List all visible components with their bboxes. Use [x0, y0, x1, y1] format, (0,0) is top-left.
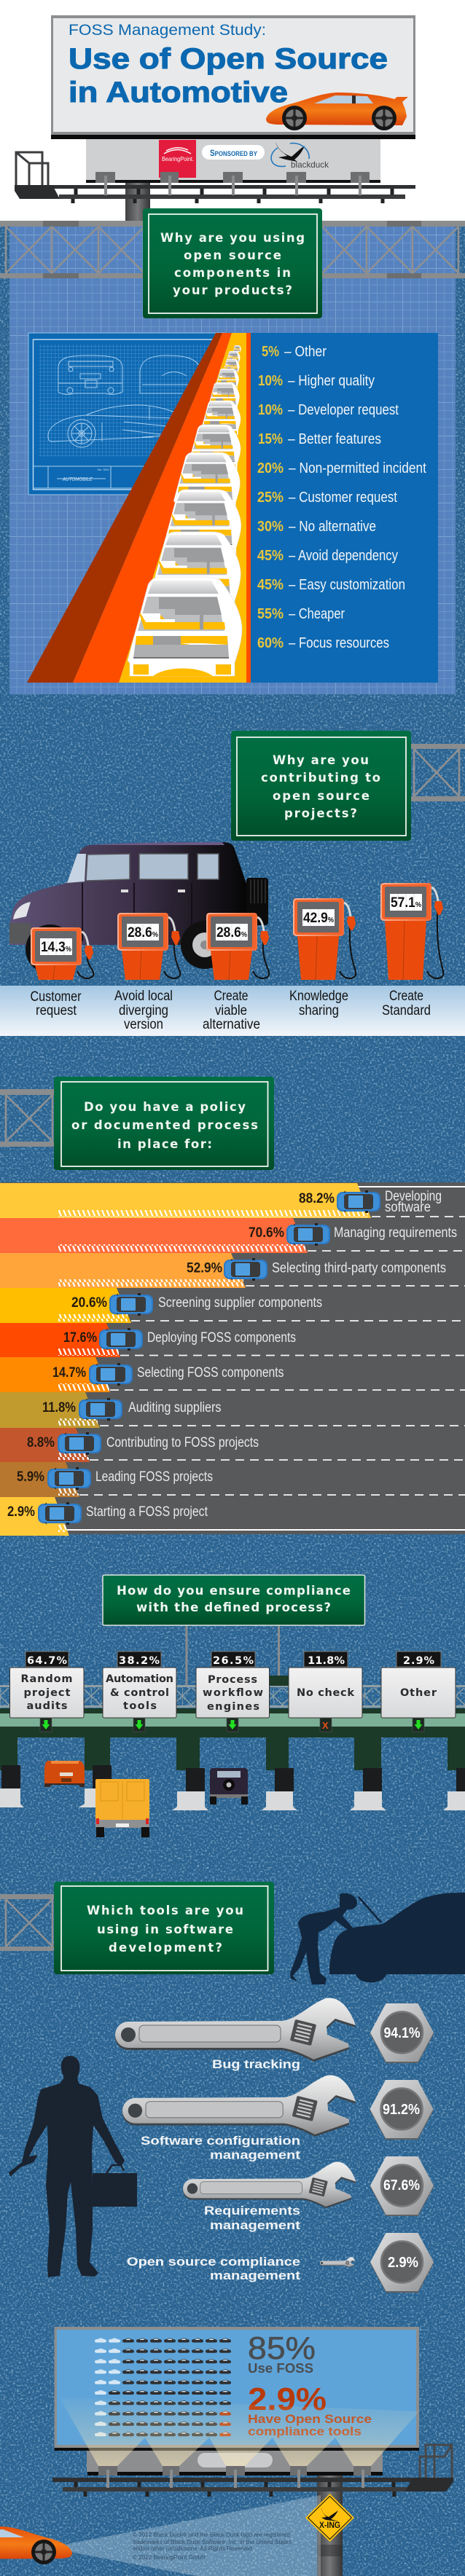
billboard railing	[16, 152, 48, 185]
toll: Other 2.9%: 2.9%	[403, 1655, 434, 1667]
pump: Knowledge sharing 42.9%	[293, 898, 356, 980]
logo: Black Duck: blackduck	[291, 160, 329, 170]
sign: How do you ensure compliance	[103, 1575, 364, 1625]
bar: Software configuration management 91.2%	[122, 2076, 433, 2162]
bottom lamps	[98, 2466, 371, 2488]
stat: 2.9% have compliance tools: compliance tools	[248, 2424, 362, 2438]
bar: Requirements management 67.6%: 67.6%	[383, 2178, 420, 2194]
toll: No check 11.8%: 11.8%	[308, 1655, 345, 1667]
copyright text: trademarks of Black Duck Software, Inc. in the United States	[133, 2539, 292, 2545]
car pictogram: dark second column	[109, 2390, 120, 2436]
bar: Screening supplier components 20.6%	[0, 1288, 322, 1323]
stat: 2.9% have compliance tools: Have Open Source	[248, 2412, 372, 2426]
toll: Process workflow engines 26.5%: 26.5%	[213, 1655, 254, 1667]
sponsored by pill	[202, 145, 265, 160]
sign: duck crossing	[305, 2494, 354, 2542]
panel: blueprint chart	[27, 333, 438, 683]
headlight beam	[64, 2495, 321, 2576]
toll: Automation & control tools 38.2%: & control	[110, 1687, 169, 1699]
toll: Process workflow engines 26.5%: engines	[207, 1701, 259, 1713]
bar: Screening supplier components 20.6%: 20.6%	[71, 1295, 107, 1311]
silhouette: mechanic and car	[290, 1893, 465, 1984]
toll: Random project audits 64.7%: 64.7%	[27, 1655, 67, 1667]
legend values	[257, 344, 426, 651]
sign: policy or documented process: Do you have a policy	[84, 1100, 246, 1114]
logo: BearingPoint: BearingPoint.	[162, 155, 194, 162]
panel: blueprint backdrop	[9, 227, 456, 694]
label strip under pumps: Create	[389, 989, 423, 1004]
bar: Bug tracking 94.1%	[115, 1998, 434, 2071]
bar: Leading FOSS projects 5.9%: Leading FOSS projects	[95, 1469, 213, 1485]
legend values: 55%	[257, 606, 284, 622]
bar: Selecting third-party components 52.9%: 52.9%	[187, 1260, 222, 1276]
catwalk	[15, 185, 415, 203]
billboard support panel	[86, 139, 380, 183]
lamp light beams	[59, 2397, 419, 2466]
road surface	[0, 1182, 465, 1534]
car pictogram: white cars	[95, 2339, 120, 2436]
bar: Requirements management 67.6%	[183, 2156, 434, 2232]
toll: Automation & control tools 38.2%: Automation	[106, 1673, 173, 1685]
bar: Deploying FOSS components 17.6%	[0, 1323, 296, 1357]
legend values: – Avoid dependency	[289, 548, 398, 564]
silhouette: mechanic with toolbox	[9, 2056, 137, 2277]
toll: Process workflow engines 26.5%: Process	[208, 1674, 257, 1686]
toll: Random project audits 64.7%: project	[23, 1687, 71, 1699]
sign: Which tools are you using: development?	[109, 1941, 222, 1955]
bar: Auditing suppliers 11.8%	[0, 1392, 222, 1428]
copyright text: and/or other jurisdictions. All Rights Reserved.	[133, 2545, 254, 2552]
chart road wedge	[27, 333, 251, 683]
toll: Automation & control tools 38.2%	[103, 1652, 176, 1732]
toll: Other 2.9%: Other	[400, 1687, 437, 1699]
panel: top billboard	[15, 15, 415, 222]
label strip under pumps: sharing	[299, 1003, 339, 1018]
toll: Automation & control tools 38.2%: 38.2%	[119, 1655, 160, 1667]
bar: Auditing suppliers 11.8%: Auditing suppliers	[128, 1400, 222, 1415]
label strip under pumps: Customer	[31, 989, 82, 1005]
sign: policy or documented process: in place for:	[117, 1137, 212, 1151]
legend values: 25%	[257, 490, 284, 506]
bar: Open source compliance management 2.9%: 2.9%	[388, 2255, 418, 2271]
bottom railing	[420, 2445, 452, 2478]
bar: Open source compliance management 2.9%: Open source compliance	[127, 2255, 300, 2269]
icon: yellow van rear	[95, 1779, 149, 1837]
sign: Why are you using open source components: Why are you using	[160, 231, 305, 245]
sign support poles	[187, 1625, 278, 1686]
sign: How do you ensure compliance: How do you ensure compliance	[117, 1584, 351, 1598]
bottom billboard face	[54, 2327, 419, 2451]
bar: Starting a FOSS project 2.9%: Starting a FOSS project	[86, 1504, 208, 1520]
legend panel	[246, 333, 438, 683]
legend values: – Cheaper	[289, 606, 345, 622]
car pictogram: dark cars	[122, 2339, 217, 2436]
stat: 2.9% have compliance tools: 2.9%	[248, 2381, 327, 2417]
toll: Automation & control tools 38.2%: tools	[123, 1700, 157, 1712]
bar: Screening supplier components 20.6%: Screening supplier components	[158, 1295, 322, 1311]
bar: Software configuration management 91.2%: Software configuration	[141, 2134, 300, 2148]
bar: Managing requirements 70.6%: 70.6%	[249, 1225, 284, 1241]
sponsored by pill: SPONSORED BY	[210, 148, 258, 158]
toll: Random project audits 64.7%	[10, 1652, 84, 1732]
bar: Leading FOSS projects 5.9%	[0, 1462, 213, 1497]
legend values: – Developer request	[288, 402, 399, 418]
sign: How do you ensure compliance: with the defined process?	[136, 1601, 331, 1614]
chart: process road bars	[0, 1182, 465, 1536]
truss: second gantry	[411, 744, 465, 801]
copyright text: © 2012 Black Duck® and the Black Duck logo are registered	[133, 2532, 290, 2538]
label strip under pumps: Standard	[382, 1003, 431, 1018]
bar: Developing software 88.2%	[0, 1183, 442, 1218]
bridge deck and pillars	[0, 1676, 465, 1810]
legend values: 45%	[257, 548, 284, 564]
sign: Why are you contributing: projects?	[284, 806, 357, 820]
toll: Process workflow engines 26.5%: workflow	[203, 1687, 263, 1699]
legend values: – No alternative	[289, 519, 376, 535]
label strip under pumps: viable	[215, 1003, 247, 1018]
blueprint drawing	[28, 333, 226, 495]
legend values: – Non-permitted incident	[289, 460, 426, 476]
legend values: 10%	[258, 373, 283, 389]
icon: orange car front	[0, 2526, 72, 2564]
toll: Other 2.9%	[381, 1652, 456, 1732]
sign: Which tools are you using: Which tools are you	[87, 1904, 243, 1917]
bar: Selecting third-party components 52.9%	[0, 1253, 446, 1288]
bar: Contributing to FOSS projects 8.8%	[0, 1428, 259, 1462]
bar: Software configuration management 91.2%: management	[210, 2148, 300, 2162]
title	[69, 43, 388, 109]
bar: Bug tracking 94.1%: 94.1%	[383, 2025, 421, 2041]
legend values: – Higher quality	[288, 373, 375, 389]
label strip under pumps	[0, 986, 465, 1036]
bar: Deploying FOSS components 17.6%: Deploying FOSS components	[147, 1330, 296, 1346]
bottom pole	[317, 2475, 343, 2576]
pump: Customer request 14.3%: 14.3%	[41, 940, 71, 955]
toll: No check 11.8%	[289, 1652, 362, 1732]
sign: Which tools are you using: using in software	[97, 1923, 233, 1936]
billboard face	[51, 15, 415, 139]
label strip under pumps: Knowledge	[289, 989, 348, 1004]
bridge truss	[0, 1686, 465, 1706]
bar: Open source compliance management 2.9%: management	[210, 2269, 300, 2282]
blueprint drawing: AUTOMOBILE	[62, 476, 93, 482]
title: Use of Open Source	[69, 43, 388, 75]
sign: Why are you contributing: open source	[273, 789, 370, 803]
bar: Selecting FOSS components 14.7%: Selecting FOSS components	[137, 1365, 284, 1381]
blueprint drawing: No. 3211	[98, 468, 110, 471]
pump: Customer request 14.3%	[31, 927, 93, 980]
bar: Contributing to FOSS projects 8.8%: 8.8%	[27, 1435, 55, 1450]
panel: bottom billboard	[52, 2327, 453, 2576]
pump: Avoid local diverging version 28.6%	[117, 913, 180, 980]
billboard lamps	[95, 172, 370, 195]
sign: Why are you using open source components: your products?	[173, 283, 292, 297]
bar: Selecting FOSS components 14.7%: 14.7%	[52, 1365, 86, 1381]
bottom catwalk	[52, 2478, 453, 2497]
sign: Why are you contributing	[231, 731, 411, 841]
label strip under pumps: request	[36, 1003, 77, 1018]
legend values: 20%	[257, 460, 284, 476]
bar: Starting a FOSS project 2.9%: 2.9%	[7, 1504, 35, 1520]
bar: Leading FOSS projects 5.9%: 5.9%	[17, 1469, 44, 1485]
legend values: – Focus resources	[289, 635, 389, 651]
bar: Selecting FOSS components 14.7%	[0, 1357, 284, 1392]
sign: Why are you using open source components	[143, 208, 322, 318]
truss: fourth gantry	[0, 1894, 54, 1951]
bar: Requirements management 67.6%: Requirements	[204, 2204, 300, 2218]
label strip under pumps: alternative	[203, 1017, 260, 1032]
bar: Software configuration management 91.2%: 91.2%	[383, 2102, 420, 2118]
legend values: 45%	[257, 577, 284, 593]
bar: Requirements management 67.6%: management	[210, 2218, 300, 2232]
label strip under pumps: diverging	[119, 1003, 168, 1018]
chart cars in perspective	[128, 345, 242, 676]
legend values: – Other	[284, 344, 327, 360]
toll: No check 11.8%: X	[322, 1720, 329, 1731]
bar: Managing requirements 70.6%	[0, 1218, 457, 1253]
toll: Random project audits 64.7%: Random	[20, 1673, 73, 1685]
label strip under pumps: Create	[214, 989, 248, 1004]
stat: 2.9% have compliance tools	[248, 2381, 372, 2438]
bar: Auditing suppliers 11.8%: 11.8%	[42, 1400, 76, 1415]
label strip under pumps: version	[124, 1017, 163, 1032]
pump: Create viable alternative 28.6%: 28.6%	[216, 925, 247, 941]
pump: Avoid local diverging version 28.6%: 28.6%	[128, 925, 158, 941]
billboard pole	[125, 183, 150, 222]
sign: policy or documented process	[54, 1077, 274, 1170]
pump: Knowledge sharing 42.9%: 42.9%	[303, 911, 334, 926]
sign: Why are you contributing: contributing to	[261, 771, 380, 785]
logo: BearingPoint	[159, 140, 196, 178]
panel: toll bridge	[0, 1575, 465, 1837]
bar: Developing software 88.2%: 88.2%	[299, 1191, 335, 1206]
car pictogram: last column	[219, 2339, 231, 2436]
toll: Process workflow engines 26.5%	[196, 1652, 270, 1732]
legend values: 60%	[257, 635, 284, 651]
copyright text	[133, 2532, 292, 2561]
toll: Random project audits 64.7%: audits	[26, 1700, 67, 1712]
icon: orange sports car	[266, 93, 408, 130]
bar: Developing software 88.2%: Developing	[385, 1189, 442, 1204]
bar: Starting a FOSS project 2.9%	[0, 1497, 208, 1536]
pump: Create viable alternative 28.6%	[206, 913, 269, 980]
truss: third gantry	[0, 1089, 54, 1147]
legend values: – Better features	[288, 431, 381, 447]
sign: Which tools are you using	[54, 1882, 274, 1974]
sign: Why are you using open source components: open source	[184, 248, 281, 262]
logo: Black Duck	[271, 141, 329, 170]
pump: Create Standard 57.1%: 57.1%	[391, 895, 421, 911]
label strip under pumps: Avoid local	[114, 989, 173, 1004]
legend values: 30%	[257, 519, 284, 535]
sign: policy or documented process: or documented process	[71, 1118, 258, 1132]
stat: 85% use FOSS: 85%	[248, 2330, 316, 2366]
bar: Contributing to FOSS projects 8.8%: Contributing to FOSS projects	[106, 1435, 259, 1450]
title: in Automotive	[69, 76, 288, 109]
bar: Bug tracking 94.1%: Bug tracking	[212, 2057, 300, 2071]
sign: Why are you using open source components: components in	[174, 266, 291, 280]
stat: 85% use FOSS: Use FOSS	[248, 2361, 313, 2376]
copyright text: © 2012 BearingPoint GmbH	[133, 2554, 206, 2561]
toll: No check 11.8%: No check	[297, 1687, 354, 1699]
legend values: – Customer request	[289, 490, 397, 506]
legend values: 10%	[258, 402, 283, 418]
legend values: – Easy customization	[289, 577, 405, 593]
legend values: 15%	[258, 431, 283, 447]
icon: dark SUV rear	[210, 1768, 248, 1805]
truss: first overhead gantry	[0, 221, 465, 278]
bar: Open source compliance management 2.9%	[127, 2233, 434, 2293]
sign: Why are you contributing: Why are you	[273, 753, 369, 767]
bar: Developing software 88.2%: software	[385, 1200, 431, 1215]
pump: Create Standard 57.1%	[380, 883, 443, 980]
bottom support panel	[87, 2451, 383, 2475]
bar: Deploying FOSS components 17.6%: 17.6%	[63, 1330, 97, 1346]
icon: dark SUV	[9, 842, 268, 974]
sign: duck crossing: X-ING	[319, 2521, 340, 2530]
legend values: 5%	[262, 344, 279, 360]
icon: red car rear	[44, 1761, 85, 1787]
subtitle: FOSS Management Study:	[69, 21, 266, 39]
